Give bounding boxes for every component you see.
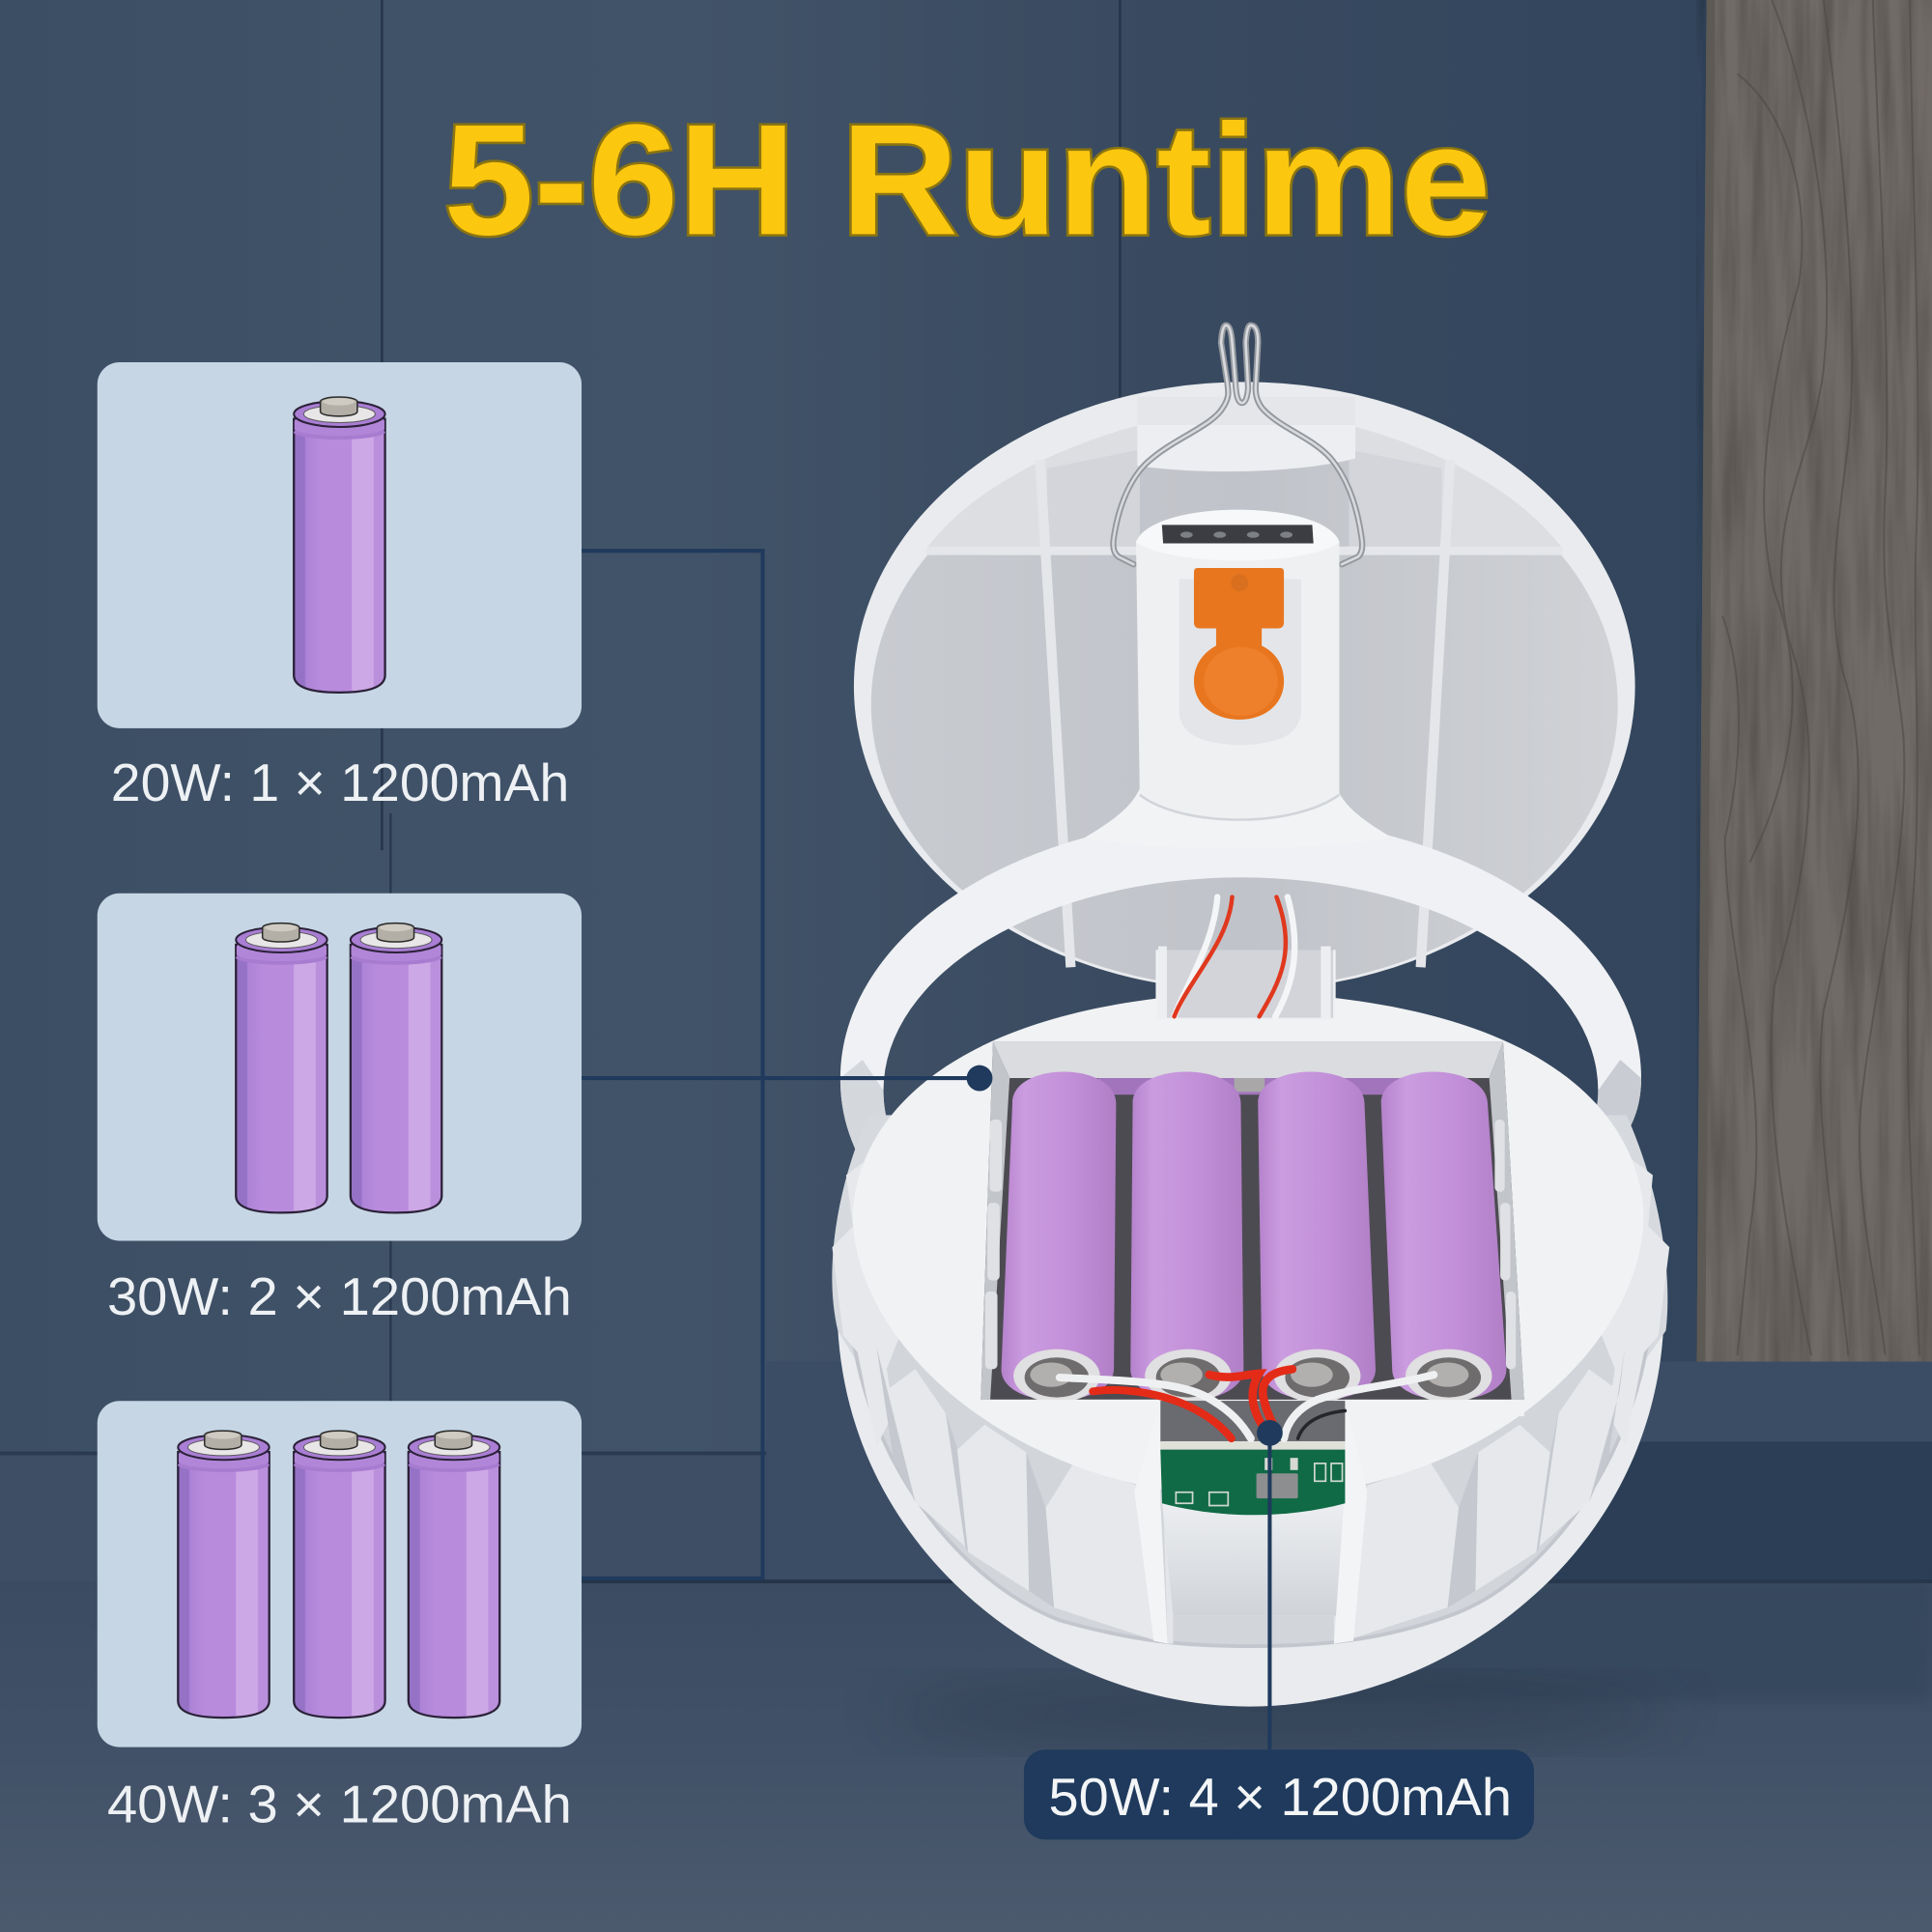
wire hanger hook [1113, 326, 1362, 564]
label: 20W: 20W: 1 × 1200mAh [111, 753, 569, 812]
plate front edge over the bay [980, 1400, 1160, 1416]
battery wires [1060, 1369, 1434, 1438]
lamp base [832, 992, 1669, 1707]
left corner post [1134, 1403, 1168, 1643]
leader lines to lamp [582, 551, 1283, 1749]
shade ring [840, 817, 1641, 1164]
panel: 40W three cells [98, 1401, 582, 1747]
gear teeth [832, 1158, 1669, 1641]
battery compartment hinge with wires [1157, 897, 1334, 1019]
control housing cylinder [1084, 510, 1392, 849]
title: 5-6H Runtime [443, 91, 1491, 268]
callout: 50W: 50W: 4 × 1200mAh [1048, 1767, 1512, 1827]
four lithium cells [1002, 1072, 1506, 1403]
top plate [853, 992, 1644, 1497]
right corner post [1334, 1403, 1367, 1643]
panel: 30W two cells [98, 894, 582, 1240]
status display [1162, 525, 1314, 543]
label: 30W: 30W: 2 × 1200mAh [107, 1266, 572, 1326]
wood panel [1696, 0, 1932, 1361]
panel: 20W one cell [98, 362, 582, 728]
orange switch cover [1194, 568, 1284, 720]
front wall below PCB [1160, 1403, 1345, 1643]
label: 40W: 40W: 3 × 1200mAh [107, 1774, 572, 1833]
PCB cutout [1160, 1401, 1345, 1515]
lamp shade: opened rear disc [854, 382, 1635, 991]
battery bay [980, 1042, 1524, 1400]
callout: 50W [1024, 1749, 1534, 1839]
